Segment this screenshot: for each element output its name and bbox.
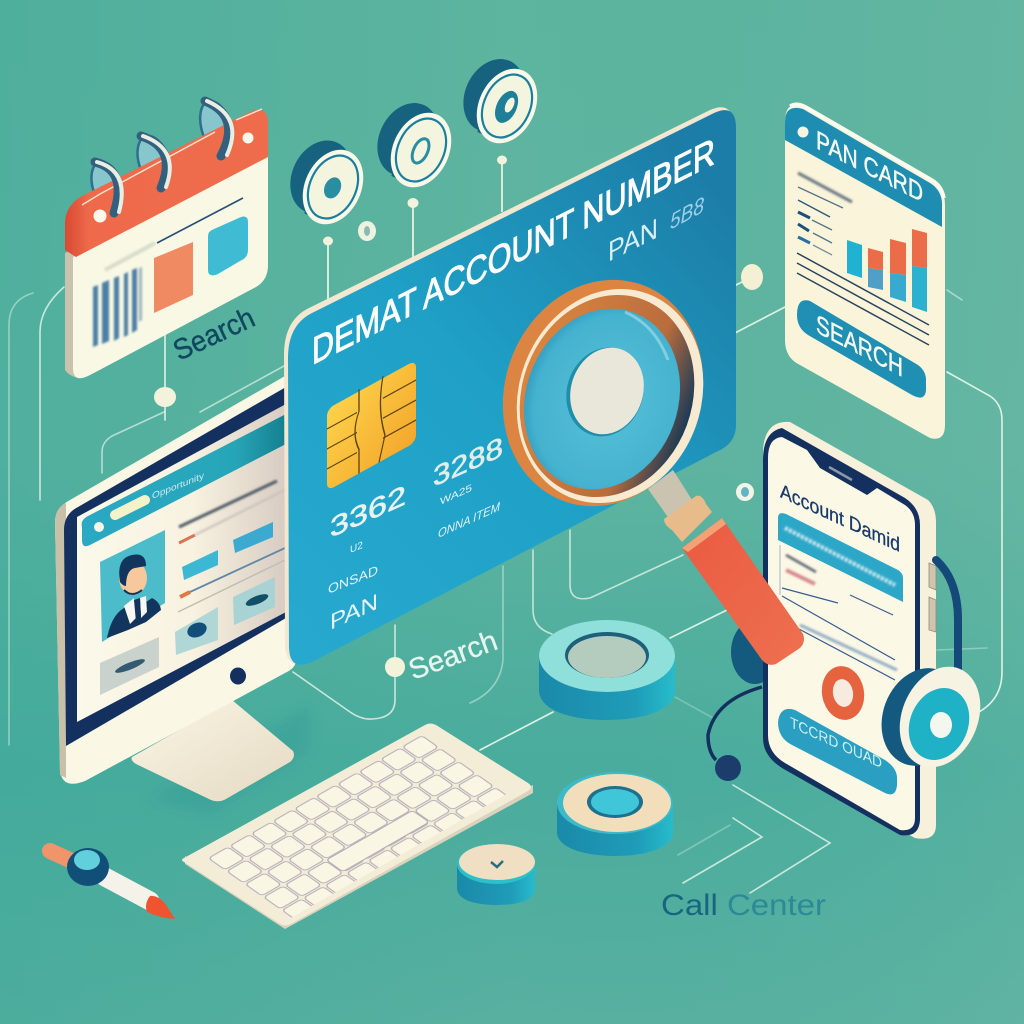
card numbers: 3362 <box>330 479 406 545</box>
device: small puck <box>457 844 535 905</box>
card small text: U2 <box>350 540 363 556</box>
connector dot: center search <box>385 657 405 677</box>
label: Call Center: Call Center <box>661 889 826 922</box>
card title: DEMAT ACCOUNT NUMBER <box>312 130 715 373</box>
phone banner <box>778 513 903 602</box>
panel: demat card <box>284 107 736 665</box>
icon: shield coin <box>450 49 550 153</box>
headset mic <box>708 687 762 760</box>
pen <box>50 848 175 919</box>
panel: PAN card: SEARCH <box>816 309 903 383</box>
calendar red header <box>65 110 268 257</box>
pin lines <box>154 156 507 407</box>
headset earcup <box>868 657 976 777</box>
PAN card top rim <box>790 104 944 198</box>
phone text lines <box>780 545 897 680</box>
PAN card header <box>785 108 942 227</box>
phone button <box>778 709 897 794</box>
magnifier handle <box>682 518 804 665</box>
calendar sheet <box>65 157 268 378</box>
calendar rings (back) <box>86 97 240 216</box>
card small text: PAN <box>330 588 378 635</box>
icon: target coin <box>364 93 464 197</box>
phone body <box>763 422 936 839</box>
monitor screen <box>77 404 286 722</box>
card small text: ONSAD <box>328 562 378 597</box>
icon: eye coin <box>277 130 376 234</box>
phone side buttons <box>929 563 936 632</box>
monitor tiles <box>100 577 275 695</box>
connector dot: PAN card <box>741 264 763 290</box>
small ring near phone <box>736 483 754 501</box>
magnifier ring <box>472 251 734 535</box>
calendar note line <box>157 198 243 243</box>
monitor shadow <box>150 705 310 815</box>
magnifying glass <box>472 251 804 665</box>
person <box>107 554 161 638</box>
headset back earcup <box>731 620 779 684</box>
magnifier highlight ball <box>555 337 655 447</box>
card small text <box>328 483 500 635</box>
calendar orange block <box>154 242 193 313</box>
phone heading: Account Damid <box>780 480 900 557</box>
calendar <box>65 97 268 378</box>
magnifier collar <box>664 496 712 542</box>
icon: small ring <box>358 221 376 241</box>
calendar rings (front) <box>95 101 232 213</box>
icons on pins <box>154 49 550 407</box>
phone: TCCRD OUAD <box>790 715 882 772</box>
PAN card sheet <box>785 104 945 439</box>
connector lines <box>9 277 1002 893</box>
card small text: WA25 <box>440 483 472 508</box>
phone bezel <box>763 428 920 835</box>
monitor: Opportunity <box>152 470 204 501</box>
panel: demat card: 5B8 <box>670 193 704 236</box>
keyboard <box>182 724 533 929</box>
label: Search (calendar): Search <box>168 302 260 367</box>
monitor stand <box>132 700 294 801</box>
calendar barcode <box>93 267 142 347</box>
magnifier metal neck <box>648 470 694 520</box>
phone screen <box>768 437 915 830</box>
calendar blue block <box>208 217 248 275</box>
PAN card title: PAN CARD <box>816 124 923 208</box>
card small text: ONNA ITEM <box>438 499 500 541</box>
device: medium puck <box>557 772 673 856</box>
keyboard keys <box>207 734 507 918</box>
panel: demat card: 3288 <box>433 431 503 494</box>
card face <box>288 110 736 665</box>
monitor header bar <box>82 414 286 546</box>
card PAN label: PAN <box>608 212 658 269</box>
magnifier glass <box>499 287 705 511</box>
PAN card search button <box>797 300 926 398</box>
monitor bezel <box>64 387 286 746</box>
card edge <box>284 107 733 664</box>
device: large puck <box>539 620 675 720</box>
PAN card bar chart <box>847 229 927 312</box>
label: Search (center): Search <box>404 625 502 687</box>
panel: PAN card <box>785 104 945 439</box>
phone record icon <box>818 663 868 723</box>
headset band <box>936 560 958 680</box>
monitor power dot <box>230 668 246 684</box>
monitor photo <box>100 530 165 642</box>
card chip <box>327 358 416 491</box>
PAN card text lines <box>797 173 929 345</box>
monitor body <box>55 376 296 784</box>
headset <box>708 560 995 781</box>
monitor lines and pills <box>178 481 285 612</box>
monitor <box>55 376 310 815</box>
phone <box>731 422 936 839</box>
